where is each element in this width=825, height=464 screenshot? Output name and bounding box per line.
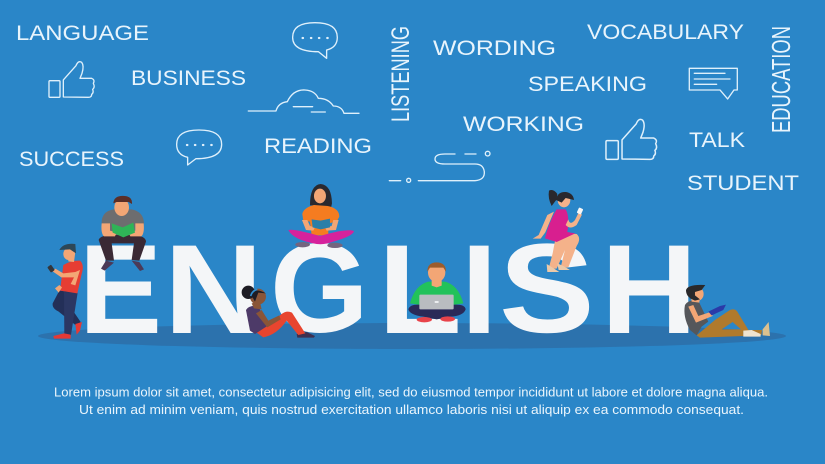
figure: man with laptop [408, 262, 466, 322]
word: STUDENT: STUDENT [687, 172, 799, 195]
figure: woman sitting against N [242, 286, 315, 338]
icon: thumbs up left [49, 62, 94, 97]
body text line 2: Ut enim ad minim veniam, quis nostrud exercitation ullamco laboris nisi ut aliquip ex ea commodo consequat. [79, 403, 744, 417]
icon: cloud [248, 90, 359, 113]
icon: winding line [389, 151, 490, 182]
word: READING: READING [264, 135, 372, 158]
word: WORKING: WORKING [463, 113, 584, 136]
body text line 1: Lorem ipsum dolor sit amet, consectetur adipisicing elit, sed do eiusmod tempor incididunt ut labore et dolore magna aliqua. [54, 386, 768, 400]
word: BUSINESS: BUSINESS [131, 67, 246, 90]
icon: speech bubble top [293, 23, 337, 58]
icon: chat message box [689, 68, 737, 99]
word: VOCABULARY: VOCABULARY [587, 21, 744, 44]
headline: ENGLISH: L [378, 219, 462, 361]
word: SUCCESS: SUCCESS [19, 148, 124, 171]
word: LANGUAGE: LANGUAGE [16, 22, 149, 45]
headline: ENGLISH: E [79, 218, 162, 360]
headline: ENGLISH: G [270, 217, 369, 359]
word: TALK: TALK [689, 129, 745, 152]
figure: man reading on H [684, 285, 770, 338]
figure: man with phone standing [47, 244, 83, 339]
icon: speech bubble lower [177, 130, 222, 165]
figure: woman cross-legged on G [288, 184, 354, 248]
icon: thumbs up right [606, 119, 657, 159]
headline: ENGLISH: H [601, 218, 697, 360]
ground shadow [38, 323, 786, 349]
headline: ENGLISH: N [164, 219, 263, 361]
figure: man reading on E [99, 196, 146, 271]
word: SPEAKING: SPEAKING [528, 73, 647, 96]
headline: ENGLISH [79, 217, 697, 361]
headline: ENGLISH: S [499, 217, 595, 359]
headline: ENGLISH: I [461, 219, 497, 361]
figure: woman with phone on S [533, 190, 583, 272]
word: WORDING: WORDING [433, 37, 556, 60]
